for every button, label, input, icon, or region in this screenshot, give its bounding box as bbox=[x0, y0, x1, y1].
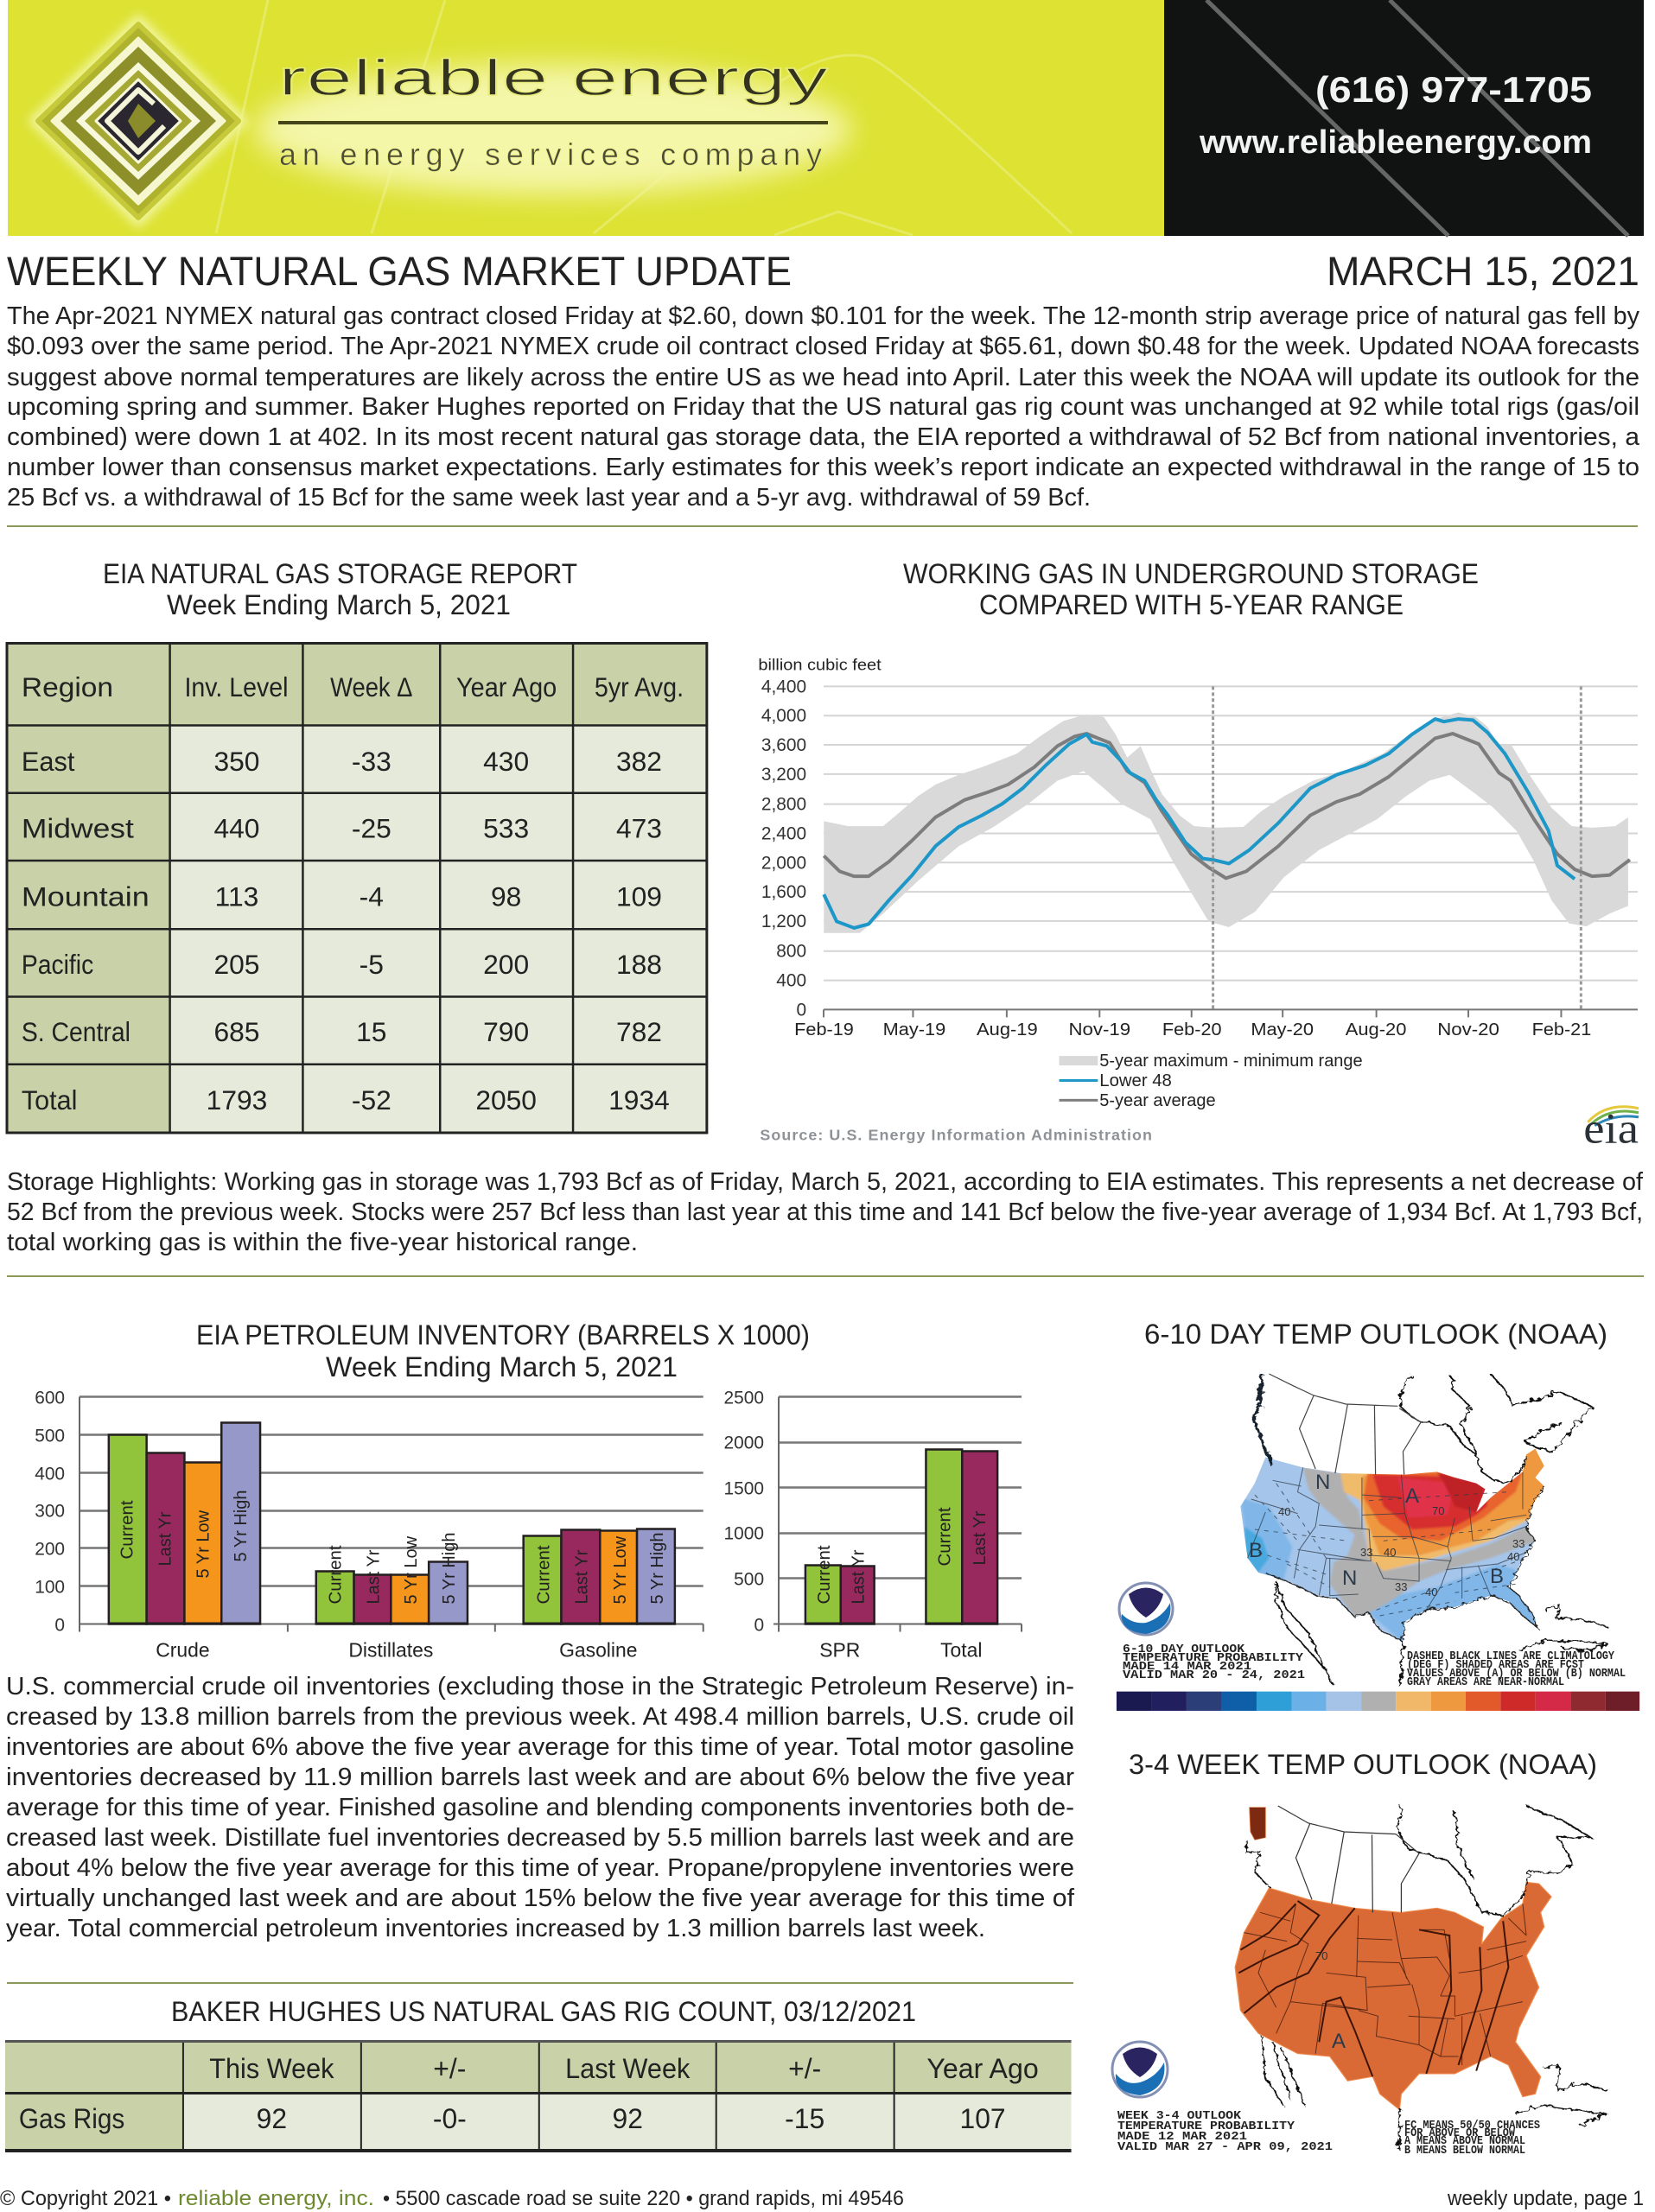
map region letters: 70 bbox=[1432, 1504, 1444, 1517]
table row: Total: 1793 bbox=[207, 1084, 267, 1116]
y axis labels: 3,200 bbox=[761, 765, 806, 785]
x axis labels: Nov-20 bbox=[1437, 1020, 1499, 1039]
right axis labels bbox=[724, 1388, 764, 1636]
rig table data row: 92 bbox=[613, 2103, 643, 2134]
map region letters: B bbox=[1490, 1565, 1504, 1588]
table header row: Region bbox=[22, 671, 113, 702]
rig table data row: 92 bbox=[257, 2103, 287, 2134]
y axis labels: 4,400 bbox=[761, 677, 806, 696]
date: MARCH 15, 2021 bbox=[1327, 248, 1639, 294]
gasoline bars bbox=[524, 1529, 675, 1624]
five-year average line bbox=[824, 734, 1630, 878]
x axis labels: Feb-20 bbox=[1162, 1020, 1222, 1039]
petroleum bar chart: SPR and total bbox=[724, 1388, 1022, 1662]
table row: Pacific: 205 bbox=[214, 949, 259, 980]
SPR and total category labels: Total bbox=[940, 1638, 982, 1662]
petroleum paragraph bbox=[6, 1673, 1075, 1942]
petroleum paragraph: about 4% below the five year average for this time of year. Propane/propylene inventories were bbox=[6, 1854, 1074, 1882]
map region letters: 40 bbox=[1384, 1546, 1396, 1559]
y axis labels: 400 bbox=[776, 971, 806, 991]
petroleum paragraph: virtually unchanged last week and are about 15% below the five year average for this time of bbox=[6, 1885, 1075, 1912]
y axis labels: 800 bbox=[776, 942, 806, 962]
table row: S. Central bbox=[22, 1016, 662, 1047]
table header row: Week Δ bbox=[330, 671, 412, 702]
table row: S. Central: S. Central bbox=[22, 1016, 130, 1047]
y axis labels: 4,000 bbox=[761, 706, 806, 726]
petroleum paragraph: average for this time of year. Finished gasoline and blending components inventories both de- bbox=[6, 1794, 1074, 1821]
6-10 day outlook heading: 6-10 DAY TEMP OUTLOOK (NOAA) bbox=[1144, 1319, 1607, 1350]
table row: Mountain: 98 bbox=[491, 881, 521, 912]
table row: Midwest: 440 bbox=[214, 812, 259, 843]
right axis labels: 2500 bbox=[724, 1388, 764, 1408]
table row: East bbox=[22, 746, 662, 777]
table row: Mountain: 109 bbox=[616, 881, 662, 912]
y axis labels: 2,400 bbox=[761, 823, 806, 843]
y axis labels bbox=[761, 677, 806, 1020]
market summary paragraph: upcoming spring and summer. Baker Hughes reported on Friday that the US natural gas rig count was unchanged at 92 while total rigs (gas/oil bbox=[7, 393, 1639, 421]
market summary paragraph: suggest above normal temperatures are likely across the entire US as we head into April. Later this week the NOAA will update its outlook for the bbox=[7, 364, 1639, 391]
tagline: an energy services company bbox=[279, 137, 822, 172]
category labels: Distillates bbox=[348, 1638, 433, 1662]
petroleum paragraph: creased by 13.8 million barrels from the previous week. At 498.4 million barrels, U.S. crude oil bbox=[6, 1703, 1074, 1731]
table row: Midwest: 473 bbox=[616, 812, 662, 843]
map region letters: 33 bbox=[1512, 1537, 1525, 1550]
category labels: Gasoline bbox=[559, 1638, 637, 1662]
map caption: MADE 12 MAR 2021 bbox=[1117, 2130, 1247, 2144]
storage highlights paragraph: 52 Bcf from the previous week. Stocks were 257 Bcf less than last year at this time and 141 Bcf below the five-year average of 1,934 Bcf. At 1,793 Bcf, bbox=[7, 1198, 1643, 1226]
y axis labels: 0 bbox=[796, 1000, 806, 1020]
table row: Total: 1934 bbox=[608, 1084, 670, 1116]
website: www.reliableenergy.com bbox=[1199, 124, 1592, 161]
table header row: Inv. Level bbox=[184, 671, 289, 702]
table row: Mountain: Mountain bbox=[22, 881, 150, 912]
x axis labels: Nov-19 bbox=[1068, 1020, 1130, 1039]
petroleum paragraph: inventories are about 6% above the five year average for this time of year. Total motor gasoline bbox=[6, 1733, 1074, 1761]
table row: S. Central: 782 bbox=[616, 1016, 662, 1047]
working gas heading: COMPARED WITH 5-YEAR RANGE bbox=[979, 589, 1404, 620]
y axis labels: 2,800 bbox=[761, 795, 806, 815]
right axis labels: 1500 bbox=[724, 1478, 764, 1499]
rig table data row: 107 bbox=[960, 2103, 1006, 2134]
x axis labels: Feb-21 bbox=[1532, 1020, 1591, 1039]
table row: Midwest: Midwest bbox=[22, 812, 134, 843]
footer contact line: © Copyright 2021 • bbox=[0, 2187, 171, 2210]
rig table data row bbox=[19, 2103, 1006, 2134]
map caption: 6-10 DAY OUTLOOK bbox=[1123, 1643, 1245, 1656]
bar labels: Current bbox=[535, 1545, 554, 1604]
storage table bbox=[7, 643, 707, 1133]
map letter: 70 bbox=[1315, 1949, 1327, 1962]
bar labels: 5 Yr High bbox=[232, 1491, 251, 1562]
storage report heading: EIA NATURAL GAS STORAGE REPORT bbox=[103, 558, 577, 589]
bar labels: Last Yr bbox=[364, 1549, 383, 1604]
table row: Mountain: 113 bbox=[215, 881, 258, 912]
chart legend: Lower 48 bbox=[1099, 1071, 1172, 1090]
canada and coast outlines bbox=[1253, 1374, 1608, 1688]
rig table header row: +/- bbox=[433, 2053, 466, 2084]
working gas heading: WORKING GAS IN UNDERGROUND STORAGE bbox=[903, 558, 1479, 589]
left axis labels: 200 bbox=[35, 1539, 65, 1560]
chart legend: 5-year average bbox=[1099, 1091, 1216, 1110]
market summary paragraph: The Apr-2021 NYMEX natural gas contract closed Friday at $2.60, down $0.101 for the week. The 12-month strip average price of natural gas fell by bbox=[7, 302, 1639, 330]
6-10 day temperature map bbox=[1117, 1374, 1639, 1711]
table row: Mountain bbox=[22, 881, 662, 912]
lower 48 line bbox=[824, 719, 1575, 928]
market summary paragraph: number lower than consensus market expectations. Early estimates for this week’s report indicate an expected withdrawal in the range of 15 to bbox=[7, 454, 1639, 481]
category labels bbox=[156, 1638, 637, 1662]
bar labels: Last Yr bbox=[572, 1549, 591, 1604]
table row: Pacific: 200 bbox=[483, 949, 529, 980]
x axis labels bbox=[794, 1020, 1591, 1039]
rig count heading: BAKER HUGHES US NATURAL GAS RIG COUNT, 03/12/2021 bbox=[171, 1996, 916, 2027]
bar labels: Last Yr bbox=[156, 1511, 175, 1566]
map caption bbox=[1123, 1643, 1305, 1682]
chart source: Source: U.S. Energy Information Administration bbox=[760, 1127, 1152, 1144]
SPR and total bar labels bbox=[815, 1507, 990, 1604]
table row: S. Central: 15 bbox=[356, 1016, 386, 1047]
petroleum paragraph: creased last week. Distillate fuel inventories decreased by 5.5 million barrels last week and are bbox=[6, 1824, 1074, 1852]
market summary paragraph bbox=[7, 302, 1640, 512]
map note: GRAY AREAS ARE NEAR-NORMAL bbox=[1407, 1675, 1564, 1689]
map letter: A bbox=[1332, 2030, 1346, 2053]
table row: Total bbox=[22, 1084, 670, 1116]
table header row: Year Ago bbox=[456, 671, 557, 702]
category labels: Crude bbox=[156, 1638, 210, 1662]
left axis labels bbox=[35, 1388, 65, 1636]
storage highlights paragraph: total working gas is within the five-year historical range. bbox=[7, 1229, 638, 1256]
map caption: VALID MAR 27 - APR 09, 2021 bbox=[1117, 2140, 1333, 2154]
map note: (DEG F) SHADED AREAS ARE FCST bbox=[1407, 1658, 1584, 1672]
map region letters: B bbox=[1249, 1539, 1263, 1562]
bar labels bbox=[118, 1491, 667, 1604]
chart legend bbox=[1060, 1052, 1363, 1110]
map caption bbox=[1117, 2109, 1333, 2154]
market summary paragraph: $0.093 over the same period. The Apr-2021 NYMEX crude oil contract closed Friday at $65.61, down $0.48 for the week. Updated NOAA forecasts bbox=[7, 333, 1639, 360]
storage highlights paragraph bbox=[7, 1168, 1644, 1256]
map note: FOR ABOVE OR BELOW bbox=[1404, 2126, 1515, 2140]
rig table data row: Gas Rigs bbox=[19, 2103, 124, 2134]
header banner bbox=[8, 0, 1164, 236]
petroleum heading: Week Ending March 5, 2021 bbox=[326, 1351, 678, 1382]
table row: East: 430 bbox=[483, 746, 529, 777]
SPR and total category labels bbox=[819, 1638, 982, 1662]
table row: Midwest bbox=[22, 812, 662, 843]
rig table header row bbox=[209, 2053, 1039, 2084]
map region letters: 33 bbox=[1395, 1580, 1407, 1593]
phone number: (616) 977-1705 bbox=[1315, 69, 1592, 110]
left axis labels: 300 bbox=[35, 1501, 65, 1522]
y axis labels: 1,600 bbox=[761, 882, 806, 902]
x axis labels: Feb-19 bbox=[794, 1020, 854, 1039]
rig table header row: This Week bbox=[209, 2053, 334, 2084]
right axis labels: 500 bbox=[734, 1569, 764, 1590]
rig table data row: -0- bbox=[433, 2103, 467, 2134]
SPR and total bar labels: Current bbox=[935, 1507, 954, 1566]
market summary paragraph: combined) were down 1 at 402. In its most recent natural gas storage data, the EIA reported a withdrawal of 52 Bcf from national inventories, a bbox=[7, 423, 1640, 451]
brand name: reliable energy bbox=[278, 50, 828, 106]
bar labels: 5 Yr Low bbox=[194, 1510, 213, 1578]
map note: DASHED BLACK LINES ARE CLIMATOLOGY bbox=[1407, 1649, 1614, 1663]
canada province lines bbox=[1278, 1806, 1419, 1912]
table row: Total: 2050 bbox=[475, 1084, 537, 1116]
bar labels: 5 Yr High bbox=[440, 1533, 459, 1604]
right axis labels: 1000 bbox=[724, 1523, 764, 1544]
icon: NOAA logo bbox=[1119, 1583, 1173, 1635]
table row: Total: Total bbox=[22, 1084, 77, 1116]
map caption: TEMPERATURE PROBABILITY bbox=[1117, 2120, 1295, 2133]
chart legend: 5-year maximum - minimum range bbox=[1099, 1052, 1363, 1071]
storage report heading: Week Ending March 5, 2021 bbox=[167, 589, 511, 620]
footer contact line: • 5500 cascade road se suite 220 • grand rapids, mi 49546 bbox=[383, 2187, 904, 2210]
rig table header row: Last Week bbox=[565, 2053, 690, 2084]
table row: S. Central: 685 bbox=[214, 1016, 259, 1047]
map region letters bbox=[1249, 1471, 1525, 1599]
rig table header row: Year Ago bbox=[926, 2053, 1039, 2084]
canada outlines bbox=[1246, 1806, 1608, 2149]
map note: B MEANS BELOW NORMAL bbox=[1404, 2144, 1525, 2158]
left axis labels: 0 bbox=[54, 1615, 65, 1636]
bar labels: Current bbox=[118, 1500, 137, 1559]
table row: Pacific: Pacific bbox=[22, 949, 93, 980]
map fill bbox=[1235, 1882, 1551, 2110]
icon: NOAA logo bbox=[1112, 2042, 1168, 2097]
rig table header row: +/- bbox=[788, 2053, 821, 2084]
bar labels: Current bbox=[327, 1545, 346, 1604]
table row: East: 382 bbox=[616, 746, 662, 777]
page number: weekly update, page 1 bbox=[1447, 2187, 1644, 2210]
distillates bars bbox=[316, 1562, 468, 1624]
state and contour lines bbox=[1248, 1467, 1526, 1616]
market summary paragraph: 25 Bcf vs. a withdrawal of 15 Bcf for the same week last year and a 5-yr avg. withdrawal of 59 Bcf. bbox=[7, 484, 1091, 512]
map note bbox=[1404, 2119, 1540, 2158]
x axis labels: May-19 bbox=[883, 1020, 945, 1039]
left axis labels: 100 bbox=[35, 1577, 65, 1598]
table row: Mountain: -4 bbox=[360, 881, 384, 912]
table row: Total: -52 bbox=[352, 1084, 391, 1116]
right axis labels: 0 bbox=[754, 1615, 764, 1636]
3-4 week temperature map bbox=[1112, 1806, 1608, 2158]
map caption: WEEK 3-4 OUTLOOK bbox=[1117, 2109, 1242, 2123]
map letter bbox=[1315, 1949, 1346, 2053]
right axis labels: 2000 bbox=[724, 1433, 764, 1453]
footer contact line: reliable energy, inc. bbox=[178, 2187, 374, 2210]
crude bars bbox=[109, 1422, 260, 1624]
storage highlights paragraph: Storage Highlights: Working gas in storage was 1,793 Bcf as of Friday, March 5, 2021, according to EIA estimates. This represents a net decrease of bbox=[7, 1168, 1644, 1196]
petroleum heading: EIA PETROLEUM INVENTORY (BARRELS X 1000) bbox=[196, 1319, 810, 1351]
left axis labels: 400 bbox=[35, 1464, 65, 1484]
petroleum paragraph: year. Total commercial petroleum inventories increased by 1.3 million barrels last week. bbox=[6, 1915, 985, 1942]
left axis labels: 500 bbox=[35, 1426, 65, 1446]
map region letters: 40 bbox=[1507, 1550, 1519, 1563]
map caption: VALID MAR 20 - 24, 2021 bbox=[1123, 1669, 1305, 1682]
map region letters: A bbox=[1405, 1484, 1419, 1508]
working gas heading bbox=[903, 558, 1479, 620]
footer contact line bbox=[0, 2187, 904, 2210]
contact panel bbox=[1164, 0, 1644, 236]
map caption: MADE 14 MAR 2021 bbox=[1123, 1660, 1251, 1674]
table header row bbox=[22, 671, 684, 702]
y axis labels: 3,600 bbox=[761, 735, 806, 755]
map note: A MEANS ABOVE NORMAL bbox=[1404, 2134, 1525, 2148]
table row: East: East bbox=[22, 746, 75, 777]
3-4 week outlook heading: 3-4 WEEK TEMP OUTLOOK (NOAA) bbox=[1129, 1749, 1597, 1780]
petroleum bar chart: crude, distillates, gasoline bbox=[35, 1388, 703, 1662]
map region letters: 33 bbox=[1360, 1546, 1372, 1559]
canada province lines bbox=[1269, 1374, 1421, 1475]
table header row: 5yr Avg. bbox=[595, 671, 684, 702]
working gas line chart bbox=[758, 656, 1639, 1153]
rig count table bbox=[5, 2040, 1072, 2152]
y axis unit: billion cubic feet bbox=[758, 656, 882, 674]
brand rule bbox=[278, 121, 828, 124]
table row: Pacific: 188 bbox=[616, 949, 662, 980]
state lines bbox=[1244, 1904, 1526, 2065]
SPR and total bar labels: Last Yr bbox=[971, 1510, 990, 1566]
petroleum heading bbox=[196, 1319, 810, 1382]
SPR and total bar labels: Current bbox=[815, 1545, 834, 1604]
SPR and total bar labels: Last Yr bbox=[850, 1549, 869, 1604]
color scale bar bbox=[1117, 1692, 1639, 1711]
table row: East: 350 bbox=[214, 746, 259, 777]
total bars bbox=[926, 1450, 997, 1624]
y axis labels: 2,000 bbox=[761, 853, 806, 873]
storage report heading bbox=[103, 558, 577, 620]
five-year range band bbox=[824, 712, 1628, 933]
petroleum paragraph: inventories decreased by 11.9 million barrels last week and are about 6% below the five year bbox=[6, 1764, 1074, 1791]
map region letters: 40 bbox=[1278, 1505, 1290, 1518]
bar labels: 5 Yr Low bbox=[611, 1535, 630, 1604]
table row: Midwest: -25 bbox=[352, 812, 391, 843]
alaska panhandle fill bbox=[1250, 1808, 1265, 1840]
y axis labels: 1,200 bbox=[761, 912, 806, 931]
SPR and total category labels: SPR bbox=[819, 1638, 860, 1662]
bar labels: 5 Yr Low bbox=[402, 1535, 421, 1604]
contour lines bbox=[1238, 1901, 1508, 2076]
petroleum paragraph: U.S. commercial crude oil inventories (excluding those in the Strategic Petroleum Reserve) in- bbox=[6, 1673, 1074, 1700]
table row: East: -33 bbox=[352, 746, 391, 777]
logo diamond bbox=[28, 14, 249, 228]
map region letters: N bbox=[1342, 1567, 1357, 1590]
table row: Pacific: -5 bbox=[360, 949, 384, 980]
x axis labels: Aug-19 bbox=[977, 1020, 1038, 1039]
map fill regions bbox=[1241, 1448, 1544, 1642]
x axis labels: May-20 bbox=[1251, 1020, 1314, 1039]
x axis labels: Aug-20 bbox=[1346, 1020, 1406, 1039]
map region letters: N bbox=[1315, 1471, 1330, 1494]
map note: FC MEANS 50/50 CHANCES bbox=[1404, 2119, 1540, 2133]
table row: S. Central: 790 bbox=[483, 1016, 529, 1047]
SPR bars bbox=[805, 1566, 875, 1624]
map caption: TEMPERATURE PROBABILITY bbox=[1123, 1651, 1304, 1665]
table row: Pacific bbox=[22, 949, 662, 980]
bar labels: 5 Yr High bbox=[648, 1533, 667, 1604]
title: WEEKLY NATURAL GAS MARKET UPDATE bbox=[7, 248, 792, 294]
rig table data row: -15 bbox=[785, 2103, 824, 2134]
map note bbox=[1407, 1649, 1626, 1689]
icon: eia logo: eia bbox=[1583, 1105, 1639, 1153]
map region letters: 40 bbox=[1425, 1586, 1437, 1599]
left axis labels: 600 bbox=[35, 1388, 65, 1408]
table row: Midwest: 533 bbox=[483, 812, 529, 843]
